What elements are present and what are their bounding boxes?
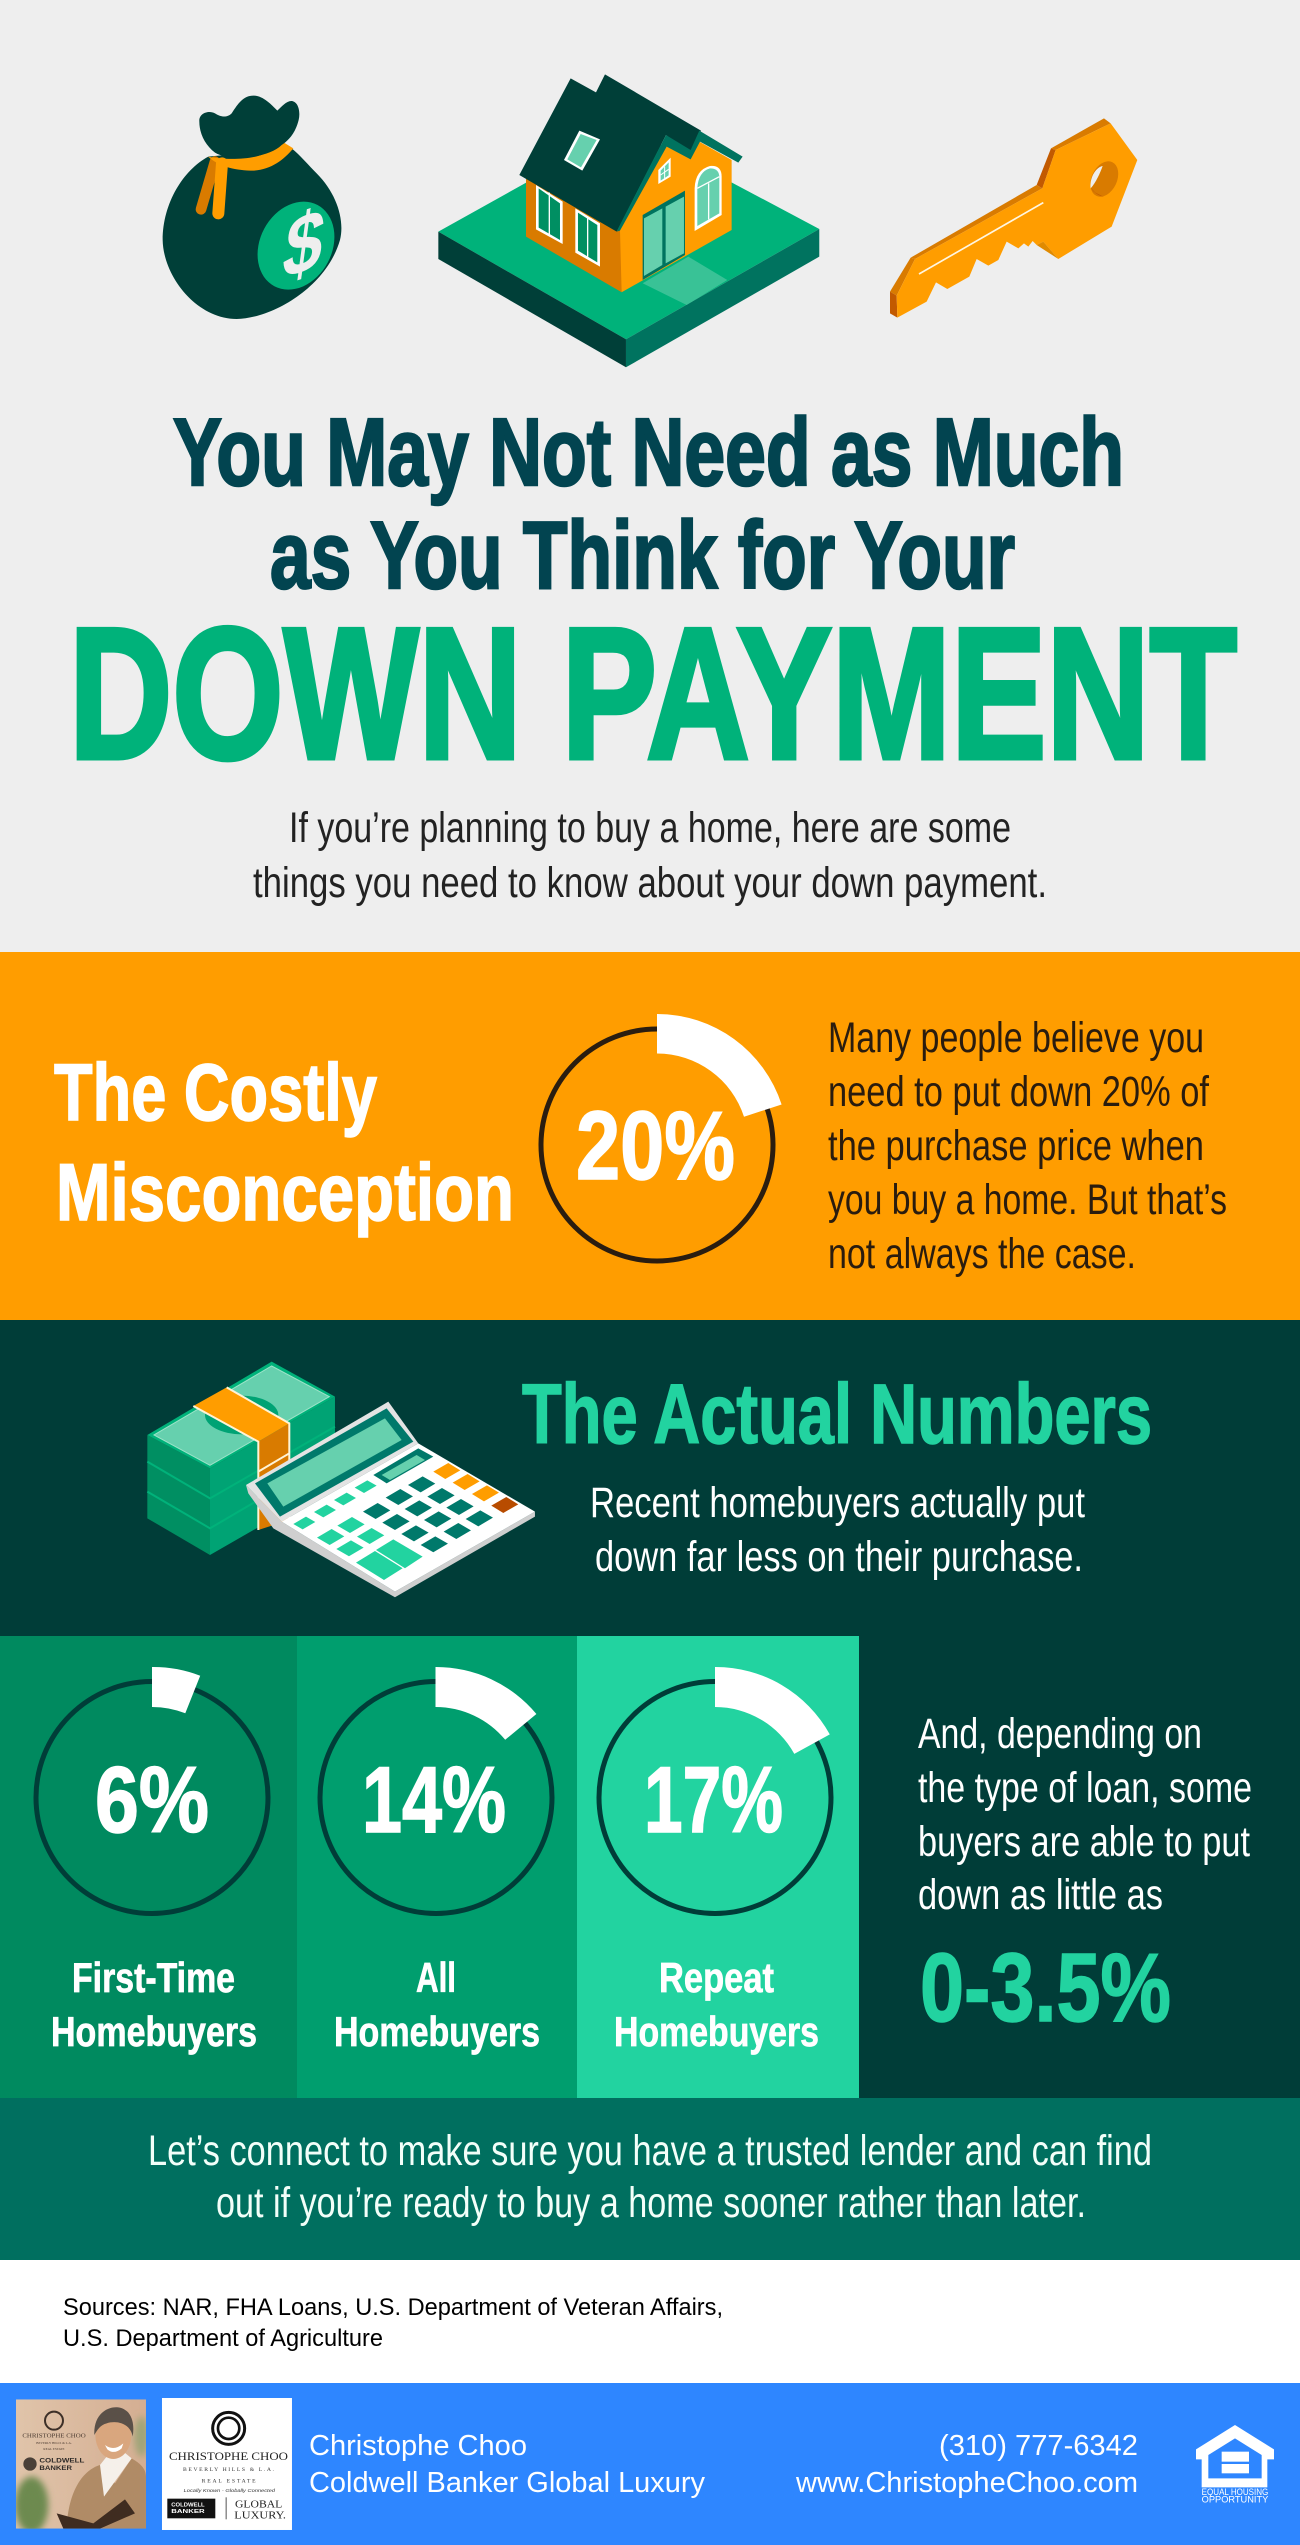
text: misconception explanation: Many people believe you [828,1014,1204,1062]
title [173,399,1124,609]
stat: repeat homebuyers: Repeat [659,1954,774,2001]
icon: equal housing opportunity: OPPORTUNITY [1202,2495,1268,2505]
contact details [795,2430,1138,2499]
icon: equal housing opportunity: EQUAL HOUSING [1202,2487,1268,2497]
agent photo: BANKER [39,2465,72,2472]
agent photo [15,2399,149,2533]
icon: money bag [163,96,349,319]
agent photo: REAL ESTATE [43,2447,65,2451]
text: loan type note: And, depending on [918,1710,1202,1758]
intro text: If you’re planning to buy a home, here are some [289,804,1011,852]
agent logo: GLOBAL [235,2499,282,2510]
text: loan type note [918,1710,1252,1919]
title: as You Think for Your [270,502,1015,609]
agent name: Coldwell Banker Global Luxury [309,2467,705,2499]
panel: call to action [0,2098,1300,2260]
panel: the costly misconception [0,952,1300,1320]
chart: 20 percent ring: 20% [576,1091,735,1200]
agent logo: BEVERLY HILLS & L.A. [183,2467,275,2473]
stat: all homebuyers: 14% [362,1747,506,1852]
text: misconception explanation: not always the case. [828,1230,1136,1278]
stat: repeat homebuyers [577,1636,859,2098]
agent photo: COLDWELL [39,2458,84,2465]
panel: sources: Sources: NAR, FHA Loans, U.S. Department of Veteran Affairs, [63,2294,723,2321]
icon: key [890,118,1137,318]
intro text [253,804,1047,907]
agent logo: LUXURY. [234,2511,286,2522]
text: recent homebuyers: Recent homebuyers actually put [590,1479,1085,1527]
contact details: www.ChristopheChoo.com [795,2467,1138,2499]
icon: equal housing opportunity [1196,2425,1274,2505]
intro text: things you need to know about your down payment. [253,859,1047,907]
chart: 20 percent ring [541,1014,782,1261]
text: misconception explanation [828,1014,1227,1278]
text: misconception explanation: the purchase price when [828,1122,1204,1170]
agent logo: Locally Known - Globally Connected [184,2488,275,2494]
stat: first-time homebuyers: First-Time [72,1954,235,2001]
panel: sources: U.S. Department of Agriculture [63,2325,383,2352]
stat: first-time homebuyers: Homebuyers [51,2008,257,2055]
contact details: (310) 777-6342 [939,2430,1138,2462]
heading: costly misconception [54,1048,514,1238]
text: loan type note: down as little as [918,1871,1163,1919]
heading: costly misconception: The Costly [54,1048,377,1138]
stat: all homebuyers [297,1636,577,2098]
stat: first-time homebuyers: 6% [95,1747,209,1852]
icon: money stack and calculator [147,1362,535,1597]
panel: sources [0,2260,1300,2383]
stat: 0-3.5 percent: 0-3.5% [920,1933,1171,2042]
text: recent homebuyers: down far less on their purchase. [595,1533,1083,1581]
stat: all homebuyers: All [416,1954,456,2001]
stat: all homebuyers: Homebuyers [334,2008,540,2055]
agent logo: BANKER [171,2509,205,2515]
agent name [309,2430,705,2499]
agent logo: REAL ESTATE [202,2478,256,2484]
icon: money bag: $ [278,189,330,299]
agent logo [162,2398,292,2530]
stat: repeat homebuyers: Homebuyers [614,2008,819,2055]
agent name: Christophe Choo [309,2430,527,2462]
heading: costly misconception: Misconception [56,1148,514,1238]
icon: house on lawn [438,74,819,367]
panel: footer [0,2383,1300,2545]
panel: the actual numbers [0,1320,1300,2098]
agent logo: COLDWELL [171,2503,205,2509]
text: recent homebuyers [590,1479,1085,1581]
agent logo: CHRISTOPHE CHOO [169,2451,288,2463]
stat: repeat homebuyers: 17% [644,1747,783,1852]
text: misconception explanation: need to put down 20% of [828,1068,1210,1116]
agent photo: BEVERLY HILLS & L.A. [36,2441,72,2445]
stat: first-time homebuyers [0,1636,297,2098]
panel: header [0,0,1300,952]
agent photo: CHRISTOPHE CHOO [22,2433,86,2439]
panel: call to action: out if you’re ready to buy a home sooner rather than later. [216,2179,1086,2227]
